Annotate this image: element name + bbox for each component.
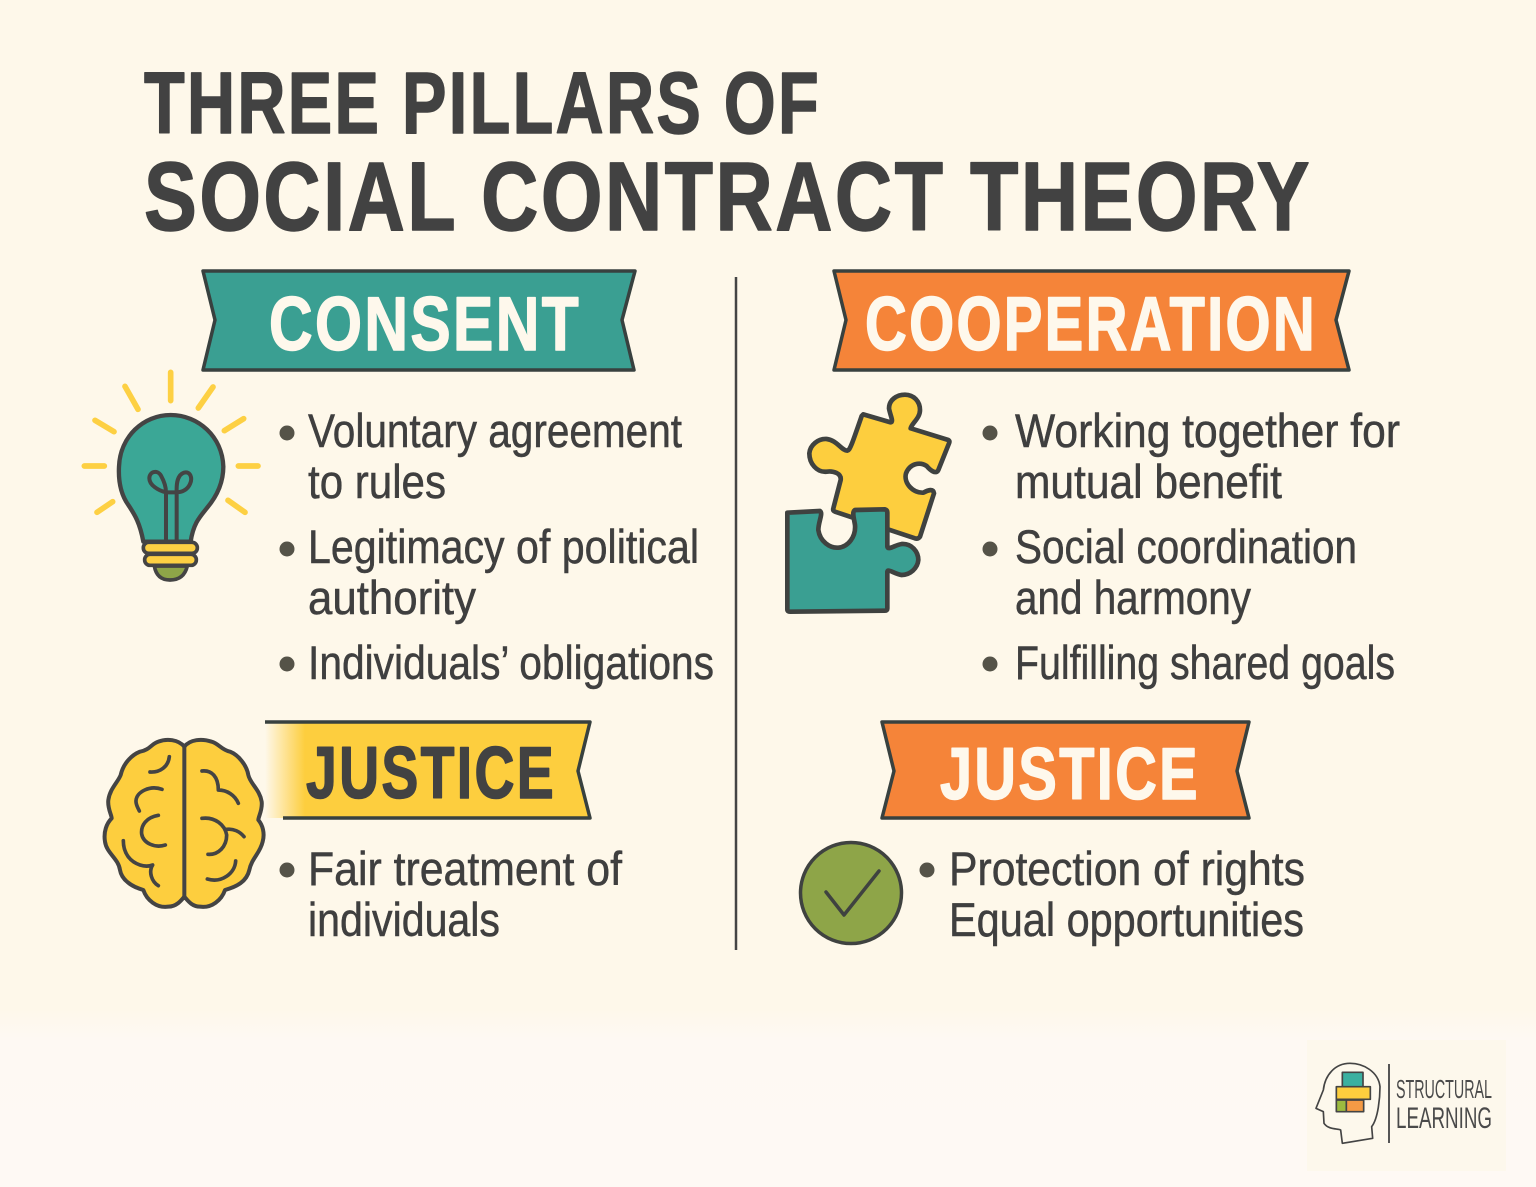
banner: consent: CONSENT xyxy=(269,282,581,367)
divider xyxy=(735,277,737,950)
bullet list: consent: Individuals’ obligations xyxy=(308,636,714,689)
panel: cooperation xyxy=(787,271,1400,689)
panel: consent xyxy=(84,271,714,689)
bullet list: consent xyxy=(280,404,714,689)
bullet list: justice right: Protection of rights xyxy=(949,842,1305,895)
icon: check circle xyxy=(800,842,902,944)
icon: light bulb xyxy=(84,372,258,580)
icon: puzzle pieces xyxy=(787,395,949,612)
banner: cooperation xyxy=(834,271,1349,370)
banner: cooperation: COOPERATION xyxy=(865,282,1317,367)
panel: justice (right) xyxy=(800,722,1305,946)
bullet list: cooperation: mutual benefit xyxy=(1015,455,1282,508)
icon: brain xyxy=(105,740,264,907)
bullet list: cooperation: Social coordination xyxy=(1015,520,1357,573)
bullet list: justice left: individuals xyxy=(308,893,500,946)
bullet list: justice left xyxy=(280,842,623,946)
bullet list: justice right: Equal opportunities xyxy=(949,893,1304,946)
logo: Structural Learning xyxy=(1307,1040,1506,1171)
icon: head with blocks xyxy=(1316,1063,1380,1143)
bullet list: cooperation: and harmony xyxy=(1015,571,1251,624)
bullet list: justice left: Fair treatment of xyxy=(308,842,623,895)
bullet list: consent: to rules xyxy=(308,455,446,508)
bullet list: justice right xyxy=(920,842,1305,946)
banner: justice orange xyxy=(882,722,1249,818)
banner: justice yellow xyxy=(265,722,590,818)
banner: justice orange: JUSTICE xyxy=(940,734,1200,815)
bullet list: cooperation: Working together for xyxy=(1015,404,1400,457)
bullet list: consent: Legitimacy of political xyxy=(308,520,699,573)
banner: justice yellow: JUSTICE xyxy=(306,733,556,814)
bullet list: cooperation xyxy=(982,404,1400,689)
title: SOCIAL CONTRACT THEORY xyxy=(144,142,1312,251)
title xyxy=(144,55,1312,251)
bullet list: consent: authority xyxy=(308,571,476,624)
panel: justice (left) xyxy=(105,722,623,946)
bullet list: consent: Voluntary agreement xyxy=(308,404,682,457)
banner: consent xyxy=(203,271,635,370)
title: THREE PILLARS OF xyxy=(144,55,821,152)
wordmark xyxy=(1396,1074,1492,1135)
bullet list: cooperation: Fulfilling shared goals xyxy=(1015,636,1395,689)
